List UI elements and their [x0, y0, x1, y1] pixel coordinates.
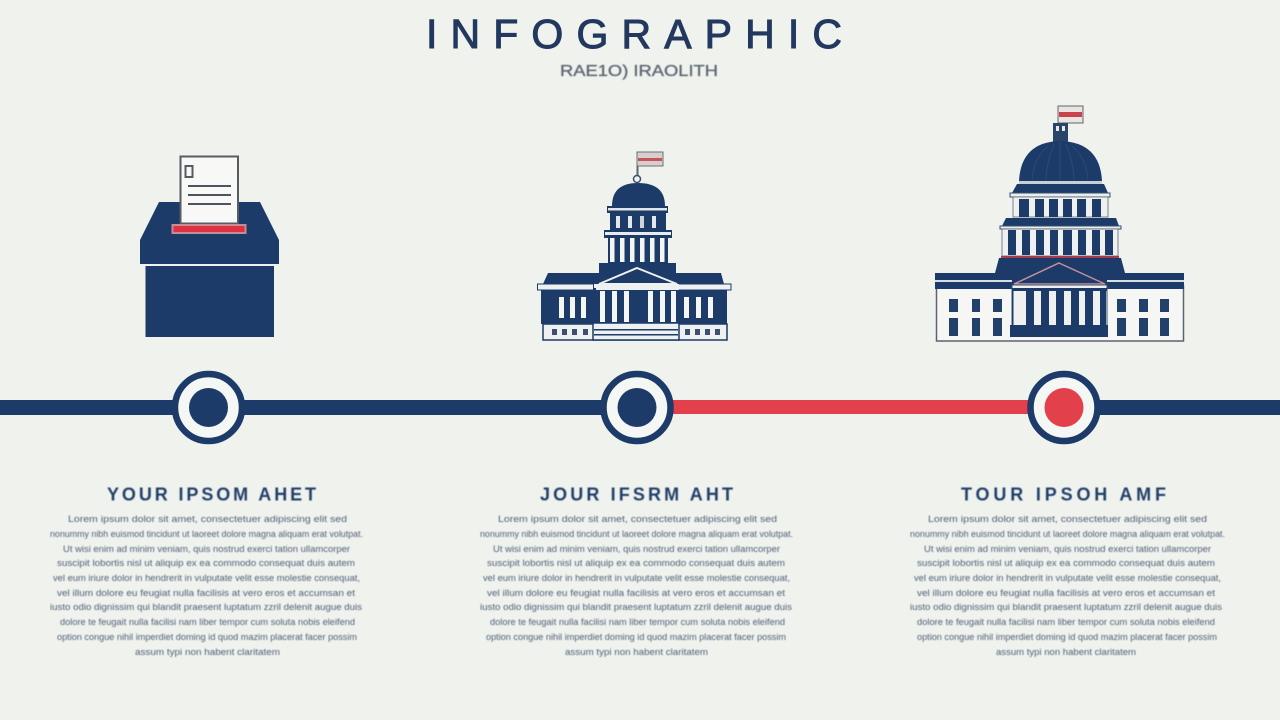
body text: column 3: suscipit lobortis nisl ut aliquip ex ea commodo consequat duis autem [917, 558, 1215, 568]
icon: small capitol building [538, 152, 731, 340]
timeline [0, 374, 1280, 441]
body text: column 1: assum typi non habent claritatem [135, 647, 280, 657]
panel: column 3 text [910, 484, 1225, 657]
body text: column 2: iusto odio dignissim qui blandit praesent luptatum zzril delenit augue duis [480, 602, 793, 612]
body text: column 1: vel eum iriure dolor in hendrerit in vulputate velit esse molestie consequat, [53, 573, 360, 583]
body text: column 1: Ut wisi enim ad minim veniam, quis nostrud exerci tation ullamcorper [63, 544, 350, 554]
title: INFOGRAPHIC [426, 11, 842, 57]
body text: column 1: vel illum dolore eu feugiat nulla facilisis at vero eros et accumsan et [57, 588, 356, 598]
marker: step 3 [1030, 374, 1098, 441]
heading: column 1: YOUR IPSOM AHET [107, 484, 316, 504]
marker: step 1 [175, 374, 242, 441]
body text: column 2: Lorem ipsum dolor sit amet, consectetuer adipiscing elit sed [498, 514, 777, 524]
body text: column 1: iusto odio dignissim qui blandit praesent luptatum zzril delenit augue duis [50, 602, 363, 612]
body text: column 1: Lorem ipsum dolor sit amet, consectetuer adipiscing elit sed [68, 514, 347, 524]
body text: column 3: vel eum iriure dolor in hendrerit in vulputate velit esse molestie consequat, [914, 573, 1221, 583]
body text: column 3: iusto odio dignissim qui blandit praesent luptatum zzril delenit augue duis [910, 602, 1223, 612]
body text: column 3: option congue nihil imperdiet doming id quod mazim placerat facer possim [917, 632, 1217, 642]
body text: column 3: vel illum dolore eu feugiat nulla facilisis at vero eros et accumsan et [917, 588, 1216, 598]
body text: column 2 [480, 514, 793, 657]
heading: column 2: JOUR IFSRM AHT [540, 484, 733, 504]
icon: ballot box [140, 156, 279, 337]
body text: column 3: Lorem ipsum dolor sit amet, consectetuer adipiscing elit sed [928, 514, 1207, 524]
body text: column 3: assum typi non habent claritatem [996, 647, 1136, 657]
body text: column 2: Ut wisi enim ad minim veniam, quis nostrud exerci tation ullamcorper [493, 544, 780, 554]
body text: column 2: assum typi non habent claritatem [565, 647, 708, 657]
body text: column 3: nonummy nibh euismod tincidunt ut laoreet dolore magna aliquam erat volutpat. [910, 529, 1225, 539]
timeline segment: red [640, 400, 1065, 414]
body text: column 3 [910, 514, 1225, 657]
subtitle: RAE1O) IRAOLITH [560, 63, 718, 80]
body text: column 2: dolore te feugait nulla facilisi nam liber tempor cum soluta nobis eleifend [490, 617, 785, 627]
panel: column 2 text [480, 484, 793, 657]
heading: column 3: TOUR IPSOH AMF [961, 484, 1166, 504]
marker: step 2 [604, 374, 670, 441]
body text: column 3: dolore te feugait nulla facilisi nam liber tempor cum soluta nobis eleifend [917, 617, 1215, 627]
body text: column 1 [50, 514, 363, 657]
timeline segment: navy right [1065, 400, 1280, 415]
body text: column 1: dolore te feugait nulla facilisi nam liber tempor cum soluta nobis eleifend [60, 617, 355, 627]
body text: column 1: nonummy nibh euismod tincidunt ut laoreet dolore magna aliquam erat volutpat. [50, 529, 363, 539]
panel: column 1 text [50, 484, 363, 657]
body text: column 2: nonummy nibh euismod tincidunt ut laoreet dolore magna aliquam erat volutpat. [480, 529, 793, 539]
body text: column 1: option congue nihil imperdiet doming id quod mazim placerat facer possim [57, 632, 357, 642]
body text: column 1: suscipit lobortis nisl ut aliquip ex ea commodo consequat duis autem [57, 558, 355, 568]
body text: column 2: option congue nihil imperdiet doming id quod mazim placerat facer possim [486, 632, 786, 642]
body text: column 2: suscipit lobortis nisl ut aliquip ex ea commodo consequat duis autem [487, 558, 785, 568]
icon: large capitol building [935, 106, 1184, 341]
body text: column 2: vel eum iriure dolor in hendrerit in vulputate velit esse molestie consequat, [483, 573, 790, 583]
body text: column 2: vel illum dolore eu feugiat nulla facilisis at vero eros et accumsan et [487, 588, 786, 598]
body text: column 3: Ut wisi enim ad minim veniam, quis nostrud exerci tation ullamcorper [924, 544, 1211, 554]
timeline segment: navy left [0, 400, 640, 415]
